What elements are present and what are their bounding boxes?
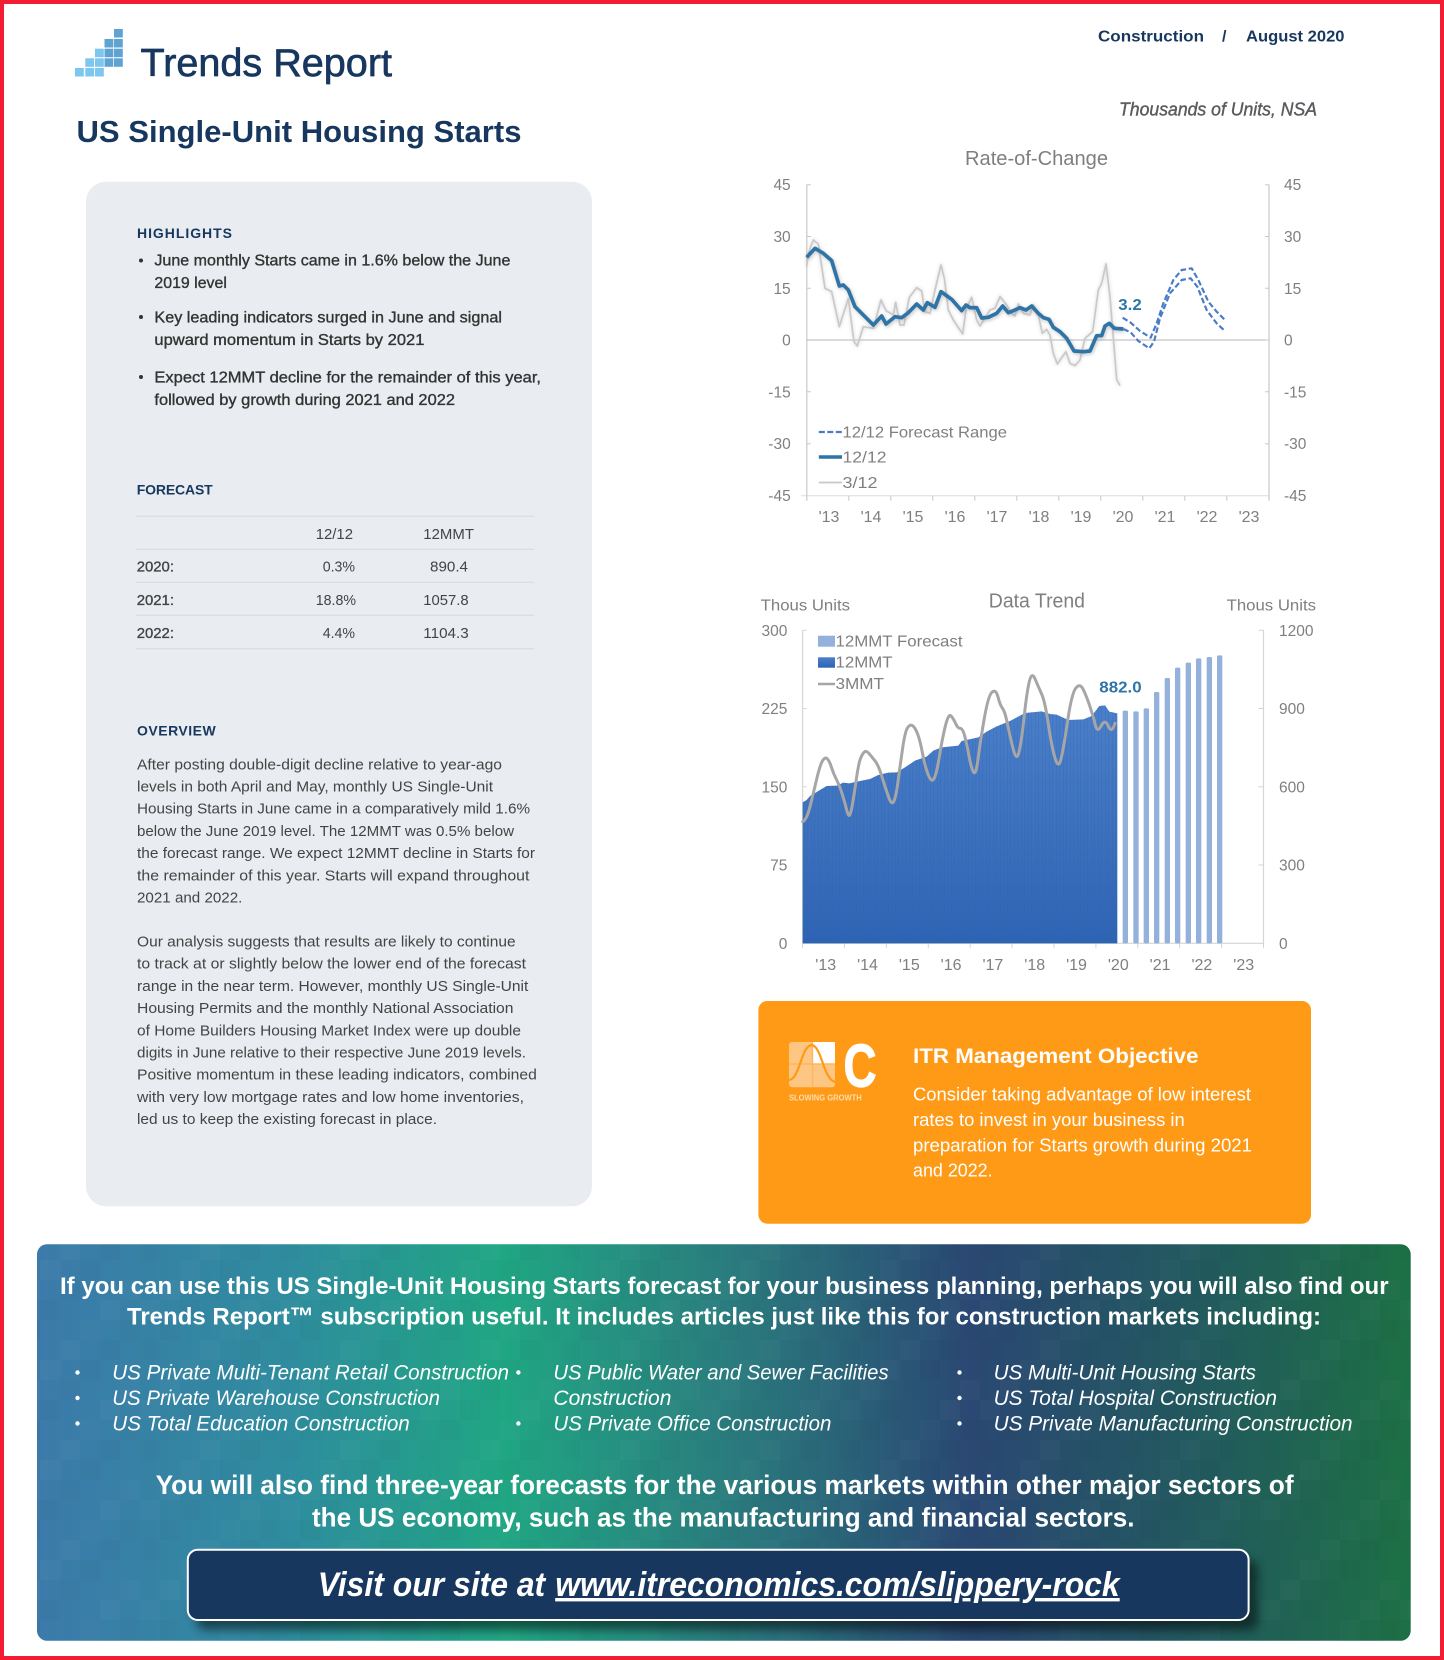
overview paragraph 1: the forecast range. We expect 12MMT decline in Starts for xyxy=(137,845,535,862)
right axis labels: 0 xyxy=(1284,332,1293,350)
logo wordmark: Trends Report xyxy=(140,42,392,85)
right axis labels: 900 xyxy=(1279,701,1305,718)
x axis year labels: '23 xyxy=(1239,509,1260,526)
objective heading: ITR Management Objective xyxy=(913,1045,1198,1068)
left axis labels: 0 xyxy=(779,936,788,953)
x axis year labels: '22 xyxy=(1191,957,1212,974)
x axis year labels xyxy=(815,957,1254,974)
panel background xyxy=(86,182,592,1206)
right axis labels: 15 xyxy=(1284,281,1301,298)
left axis labels: 45 xyxy=(773,177,791,194)
x axis year labels: '14 xyxy=(861,509,882,526)
highlight bullet 3: followed by growth during 2021 and 2022 xyxy=(154,392,455,409)
list column 3 xyxy=(957,1361,1353,1435)
promo intro text: If you can use this US Single-Unit Housing Starts forecast for your business planning, perhaps you will also find our xyxy=(60,1273,1389,1300)
x axis year labels: '13 xyxy=(819,509,840,526)
forecast range lower xyxy=(1123,278,1225,348)
12MMT forecast bars xyxy=(1123,655,1222,943)
units note: Thousands of Units, NSA xyxy=(1119,99,1317,119)
overview paragraph 1: After posting double-digit decline relative to year-ago xyxy=(137,756,502,773)
panel background xyxy=(37,1244,1411,1641)
left axis labels: 300 xyxy=(762,623,788,640)
highlight bullet 2: upward momentum in Starts by 2021 xyxy=(154,332,424,349)
highlights section xyxy=(137,225,541,409)
overview paragraph 2: range in the near term. However, monthly US Single-Unit xyxy=(137,978,529,995)
objective body text: rates to invest in your business in xyxy=(913,1110,1185,1130)
left axis labels xyxy=(768,177,791,505)
x axis year labels xyxy=(819,509,1260,526)
promo closing text xyxy=(156,1470,1295,1533)
panel: ITR management objective xyxy=(758,1001,1311,1224)
table row 2022: 1104.3 xyxy=(423,625,469,642)
x axis year labels: '19 xyxy=(1066,957,1087,974)
overview paragraph 1: below the June 2019 level. The 12MMT was 0.5% below xyxy=(137,823,514,840)
promo intro text: Trends Report™ subscription useful. It includes articles just like this for construction markets including: xyxy=(127,1303,1321,1330)
3/12 line xyxy=(807,240,1120,386)
table row 2020: 2020: xyxy=(137,559,174,576)
table row 2021: 18.8% xyxy=(316,592,356,609)
overview paragraph 2: led us to keep the existing forecast in place. xyxy=(137,1111,437,1128)
icon: slowing growth phase C: SLOWING GROWTH xyxy=(789,1094,862,1103)
right axis labels xyxy=(1279,623,1314,953)
promo closing text: You will also find three-year forecasts for the various markets within other major sectors of xyxy=(156,1470,1295,1500)
x axis year labels: '23 xyxy=(1233,957,1254,974)
overview heading: OVERVIEW xyxy=(137,722,216,738)
right axis labels: 1200 xyxy=(1279,623,1314,640)
overview paragraph 1: Housing Starts in June came in a comparatively mild 1.6% xyxy=(137,801,530,818)
overview paragraph 2: to track at or slightly below the lower end of the forecast xyxy=(137,956,527,973)
x axis year labels: '17 xyxy=(987,509,1008,526)
right unit label: Thous Units xyxy=(1227,598,1316,615)
objective body text: preparation for Starts growth during 2021 xyxy=(913,1135,1252,1155)
table row 2021: 1057.8 xyxy=(423,592,469,609)
list column 3: US Multi-Unit Housing Starts xyxy=(994,1361,1256,1384)
icon: slowing growth phase C xyxy=(789,1032,876,1103)
table header row: 12MMT xyxy=(423,526,474,543)
forecast heading: FORECAST xyxy=(137,482,213,498)
chart: rate-of-change xyxy=(768,148,1307,526)
list column 3: US Total Hospital Construction xyxy=(994,1387,1277,1410)
x axis year labels: '21 xyxy=(1155,509,1176,526)
legend: 12/12 Forecast Range xyxy=(842,424,1007,442)
x axis year labels: '14 xyxy=(857,957,878,974)
right axis labels: -30 xyxy=(1284,436,1307,453)
3MMT line xyxy=(803,676,1115,822)
left axis labels: 0 xyxy=(782,332,791,350)
12/12 line xyxy=(807,248,1124,353)
list column 2: US Private Office Construction xyxy=(553,1412,831,1435)
overview paragraph 2: Housing Permits and the monthly National Association xyxy=(137,1000,514,1017)
axes and ticks xyxy=(803,630,1264,948)
highlight bullet 2 xyxy=(139,309,502,349)
list column 2: US Public Water and Sewer Facilities xyxy=(553,1361,889,1384)
right axis labels: 600 xyxy=(1279,780,1305,796)
list column 2: Construction xyxy=(553,1387,671,1410)
logo: stepped squares icon xyxy=(75,29,123,76)
overview paragraph 1 xyxy=(137,756,535,906)
chart title: Rate-of-Change xyxy=(965,148,1108,170)
list column 1: US Private Multi-Tenant Retail Construction xyxy=(112,1361,509,1384)
table row 2022 xyxy=(137,625,469,642)
chart: data trend xyxy=(761,590,1316,974)
left axis labels: -45 xyxy=(768,488,791,505)
overview paragraph 2: Positive momentum in these leading indicators, combined xyxy=(137,1067,537,1084)
list column 1: US Private Warehouse Construction xyxy=(112,1387,440,1410)
legend: 12MMT Forecast xyxy=(836,634,963,651)
right axis labels: 300 xyxy=(1279,858,1305,875)
header: sector and date: Construction xyxy=(1098,28,1204,46)
table row 2020: 0.3% xyxy=(323,559,355,576)
promo intro text xyxy=(60,1273,1389,1330)
x axis year labels: '17 xyxy=(982,957,1003,974)
header: sector and date: August 2020 xyxy=(1246,28,1345,46)
overview paragraph 2: of Home Builders Housing Market Index were up double xyxy=(137,1022,521,1039)
right axis labels: 45 xyxy=(1284,177,1301,194)
highlights heading: HIGHLIGHTS xyxy=(137,225,232,241)
x axis year labels: '22 xyxy=(1197,509,1218,526)
panel: subscription promo xyxy=(37,1244,1411,1641)
left axis labels: -30 xyxy=(768,436,791,453)
overview paragraph 2: with very low mortgage rates and low home inventories, xyxy=(136,1089,524,1106)
overview paragraph 2 xyxy=(136,934,537,1128)
x axis year labels: '15 xyxy=(899,957,920,974)
legend xyxy=(819,424,1007,492)
table row 2020 xyxy=(137,559,468,576)
x axis year labels: '16 xyxy=(945,509,966,526)
highlight bullet 1 xyxy=(139,253,510,292)
x axis year labels: '13 xyxy=(815,957,836,974)
legend: 3MMT xyxy=(836,676,884,693)
header: sector and date xyxy=(1098,28,1345,46)
highlight bullet 3: Expect 12MMT decline for the remainder of this year, xyxy=(154,369,541,386)
overview paragraph 1: the remainder of this year. Starts will expand throughout xyxy=(137,867,530,884)
x axis year labels: '18 xyxy=(1029,509,1050,526)
x axis year labels: '21 xyxy=(1150,957,1171,974)
legend xyxy=(818,634,963,693)
call-to-action button: Visit our site at xyxy=(318,1566,547,1604)
left axis labels: 15 xyxy=(773,281,791,298)
highlight bullet 1: 2019 level xyxy=(154,275,227,292)
x axis year labels: '15 xyxy=(903,509,924,526)
overview paragraph 1: 2021 and 2022. xyxy=(137,890,242,906)
x axis year labels: '20 xyxy=(1108,957,1129,974)
axes and ticks xyxy=(801,185,1269,501)
table header row: 12/12 xyxy=(316,526,353,543)
legend: 12/12 xyxy=(842,450,887,466)
right axis labels: -15 xyxy=(1284,384,1306,401)
left axis labels: 150 xyxy=(762,780,788,796)
table row 2021 xyxy=(137,592,469,609)
overview paragraph 2: Our analysis suggests that results are likely to continue xyxy=(137,934,516,950)
title: US Single-Unit Housing Starts xyxy=(76,114,522,149)
call-to-action button: www.itreconomics.com/slippery-rock xyxy=(555,1566,1122,1604)
legend: 12MMT xyxy=(836,655,893,672)
call-to-action button xyxy=(188,1550,1258,1630)
promo closing text: the US economy, such as the manufacturing and financial sectors. xyxy=(312,1503,1134,1533)
list column 1 xyxy=(75,1361,509,1435)
highlight bullet 1: June monthly Starts came in 1.6% below the June xyxy=(154,253,510,270)
panel: left summary xyxy=(86,182,592,1206)
table row 2020: 890.4 xyxy=(430,559,468,576)
left axis labels: -15 xyxy=(768,384,791,401)
list column 1: US Total Education Construction xyxy=(112,1412,410,1435)
overview section xyxy=(136,722,537,1128)
list column 3: US Private Manufacturing Construction xyxy=(994,1412,1353,1435)
x axis year labels: '19 xyxy=(1071,509,1092,526)
objective body text xyxy=(913,1085,1252,1181)
left axis labels xyxy=(762,623,788,953)
header: sector and date: / xyxy=(1222,28,1227,46)
table row 2022: 2022: xyxy=(137,625,174,642)
forecast range upper xyxy=(1123,268,1225,338)
highlight bullet 2: Key leading indicators surged in June and signal xyxy=(154,309,502,326)
objective body text: Consider taking advantage of low interest xyxy=(913,1085,1251,1105)
forecast table xyxy=(136,482,534,649)
x axis year labels: '18 xyxy=(1024,957,1045,974)
left unit label: Thous Units xyxy=(761,598,850,615)
chart title: Data Trend xyxy=(989,590,1085,612)
right axis labels xyxy=(1284,177,1307,505)
x axis year labels: '16 xyxy=(941,957,962,974)
table header row xyxy=(316,526,474,543)
legend: 3/12 xyxy=(842,475,878,492)
left axis labels: 75 xyxy=(770,858,787,875)
latest value label: 3.2 xyxy=(1118,297,1142,314)
highlight bullet 3 xyxy=(139,369,541,409)
overview paragraph 2: digits in June relative to their respective June 2019 levels. xyxy=(137,1044,526,1062)
left axis labels: 225 xyxy=(762,701,787,718)
table row 2021: 2021: xyxy=(137,592,174,609)
table row 2022: 4.4% xyxy=(323,625,355,642)
right axis labels: 0 xyxy=(1279,936,1288,953)
icon: slowing growth phase C: C xyxy=(844,1032,876,1100)
objective body text: and 2022. xyxy=(913,1161,993,1181)
panel background xyxy=(758,1001,1311,1224)
right axis labels: 30 xyxy=(1284,229,1302,246)
x axis year labels: '20 xyxy=(1113,509,1134,526)
latest value label: 882.0 xyxy=(1099,679,1142,696)
list column 2 xyxy=(516,1361,889,1435)
overview paragraph 1: levels in both April and May, monthly US Single-Unit xyxy=(137,778,494,796)
12MMT bars xyxy=(803,705,1117,943)
right axis labels: -45 xyxy=(1284,488,1306,505)
left axis labels: 30 xyxy=(773,229,791,246)
